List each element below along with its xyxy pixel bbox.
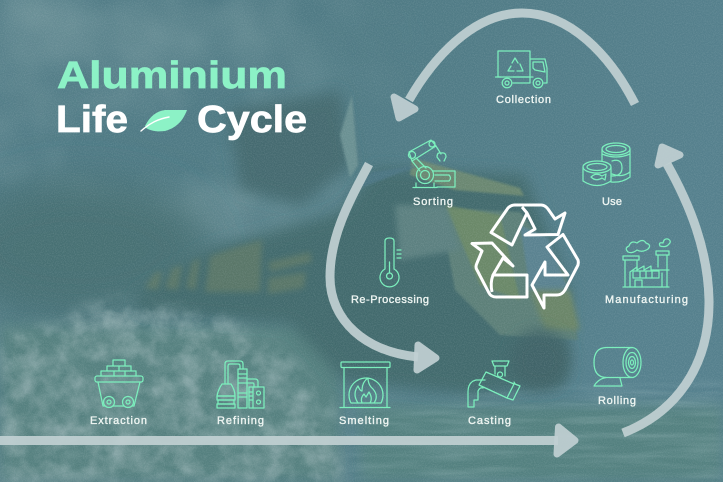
step: re-processing xyxy=(351,238,429,306)
icon: mining cart xyxy=(95,360,143,408)
label: Refining: Refining xyxy=(217,415,264,427)
step: manufacturing xyxy=(605,239,688,306)
arrow: straight from extraction to casting xyxy=(0,427,575,454)
step: casting xyxy=(468,361,520,427)
arrow: use over collection to sorting xyxy=(394,13,635,118)
step: collection xyxy=(496,51,551,106)
arrow: rolling up to use xyxy=(623,147,709,433)
icon: factory xyxy=(623,239,670,287)
heading: Life: Life xyxy=(56,99,128,141)
icon: recycling symbol xyxy=(472,205,578,308)
label: Extraction: Extraction xyxy=(90,415,147,427)
title xyxy=(56,55,307,141)
heading: Cycle: Cycle xyxy=(197,99,307,141)
step: use xyxy=(583,143,630,208)
icon: leaf xyxy=(141,110,187,131)
arrow: sorting to casting loop xyxy=(330,164,436,370)
icon: casting ladle xyxy=(468,361,520,407)
icon: distillation apparatus xyxy=(217,361,264,408)
icon: robot arm xyxy=(408,140,455,188)
icon: thermometer xyxy=(380,238,401,287)
label: Casting: Casting xyxy=(468,415,511,427)
step: rolling xyxy=(594,348,641,407)
label: Collection: Collection xyxy=(496,94,551,106)
label: Re-Processing: Re-Processing xyxy=(351,294,429,306)
step: smelting xyxy=(339,362,390,427)
step: refining xyxy=(217,361,264,427)
icon: cans xyxy=(583,143,630,186)
label: Use: Use xyxy=(602,196,622,208)
label: Manufacturing: Manufacturing xyxy=(605,294,688,306)
heading: Aluminium: Aluminium xyxy=(57,55,287,97)
label: Smelting: Smelting xyxy=(339,415,389,427)
label: Sorting: Sorting xyxy=(413,196,453,208)
icon: recycling truck xyxy=(496,51,547,88)
icon: furnace with flame xyxy=(340,362,390,408)
icon: metal roll xyxy=(594,348,641,386)
step: sorting xyxy=(408,140,455,208)
step: extraction xyxy=(90,360,147,427)
label: Rolling: Rolling xyxy=(598,395,636,407)
